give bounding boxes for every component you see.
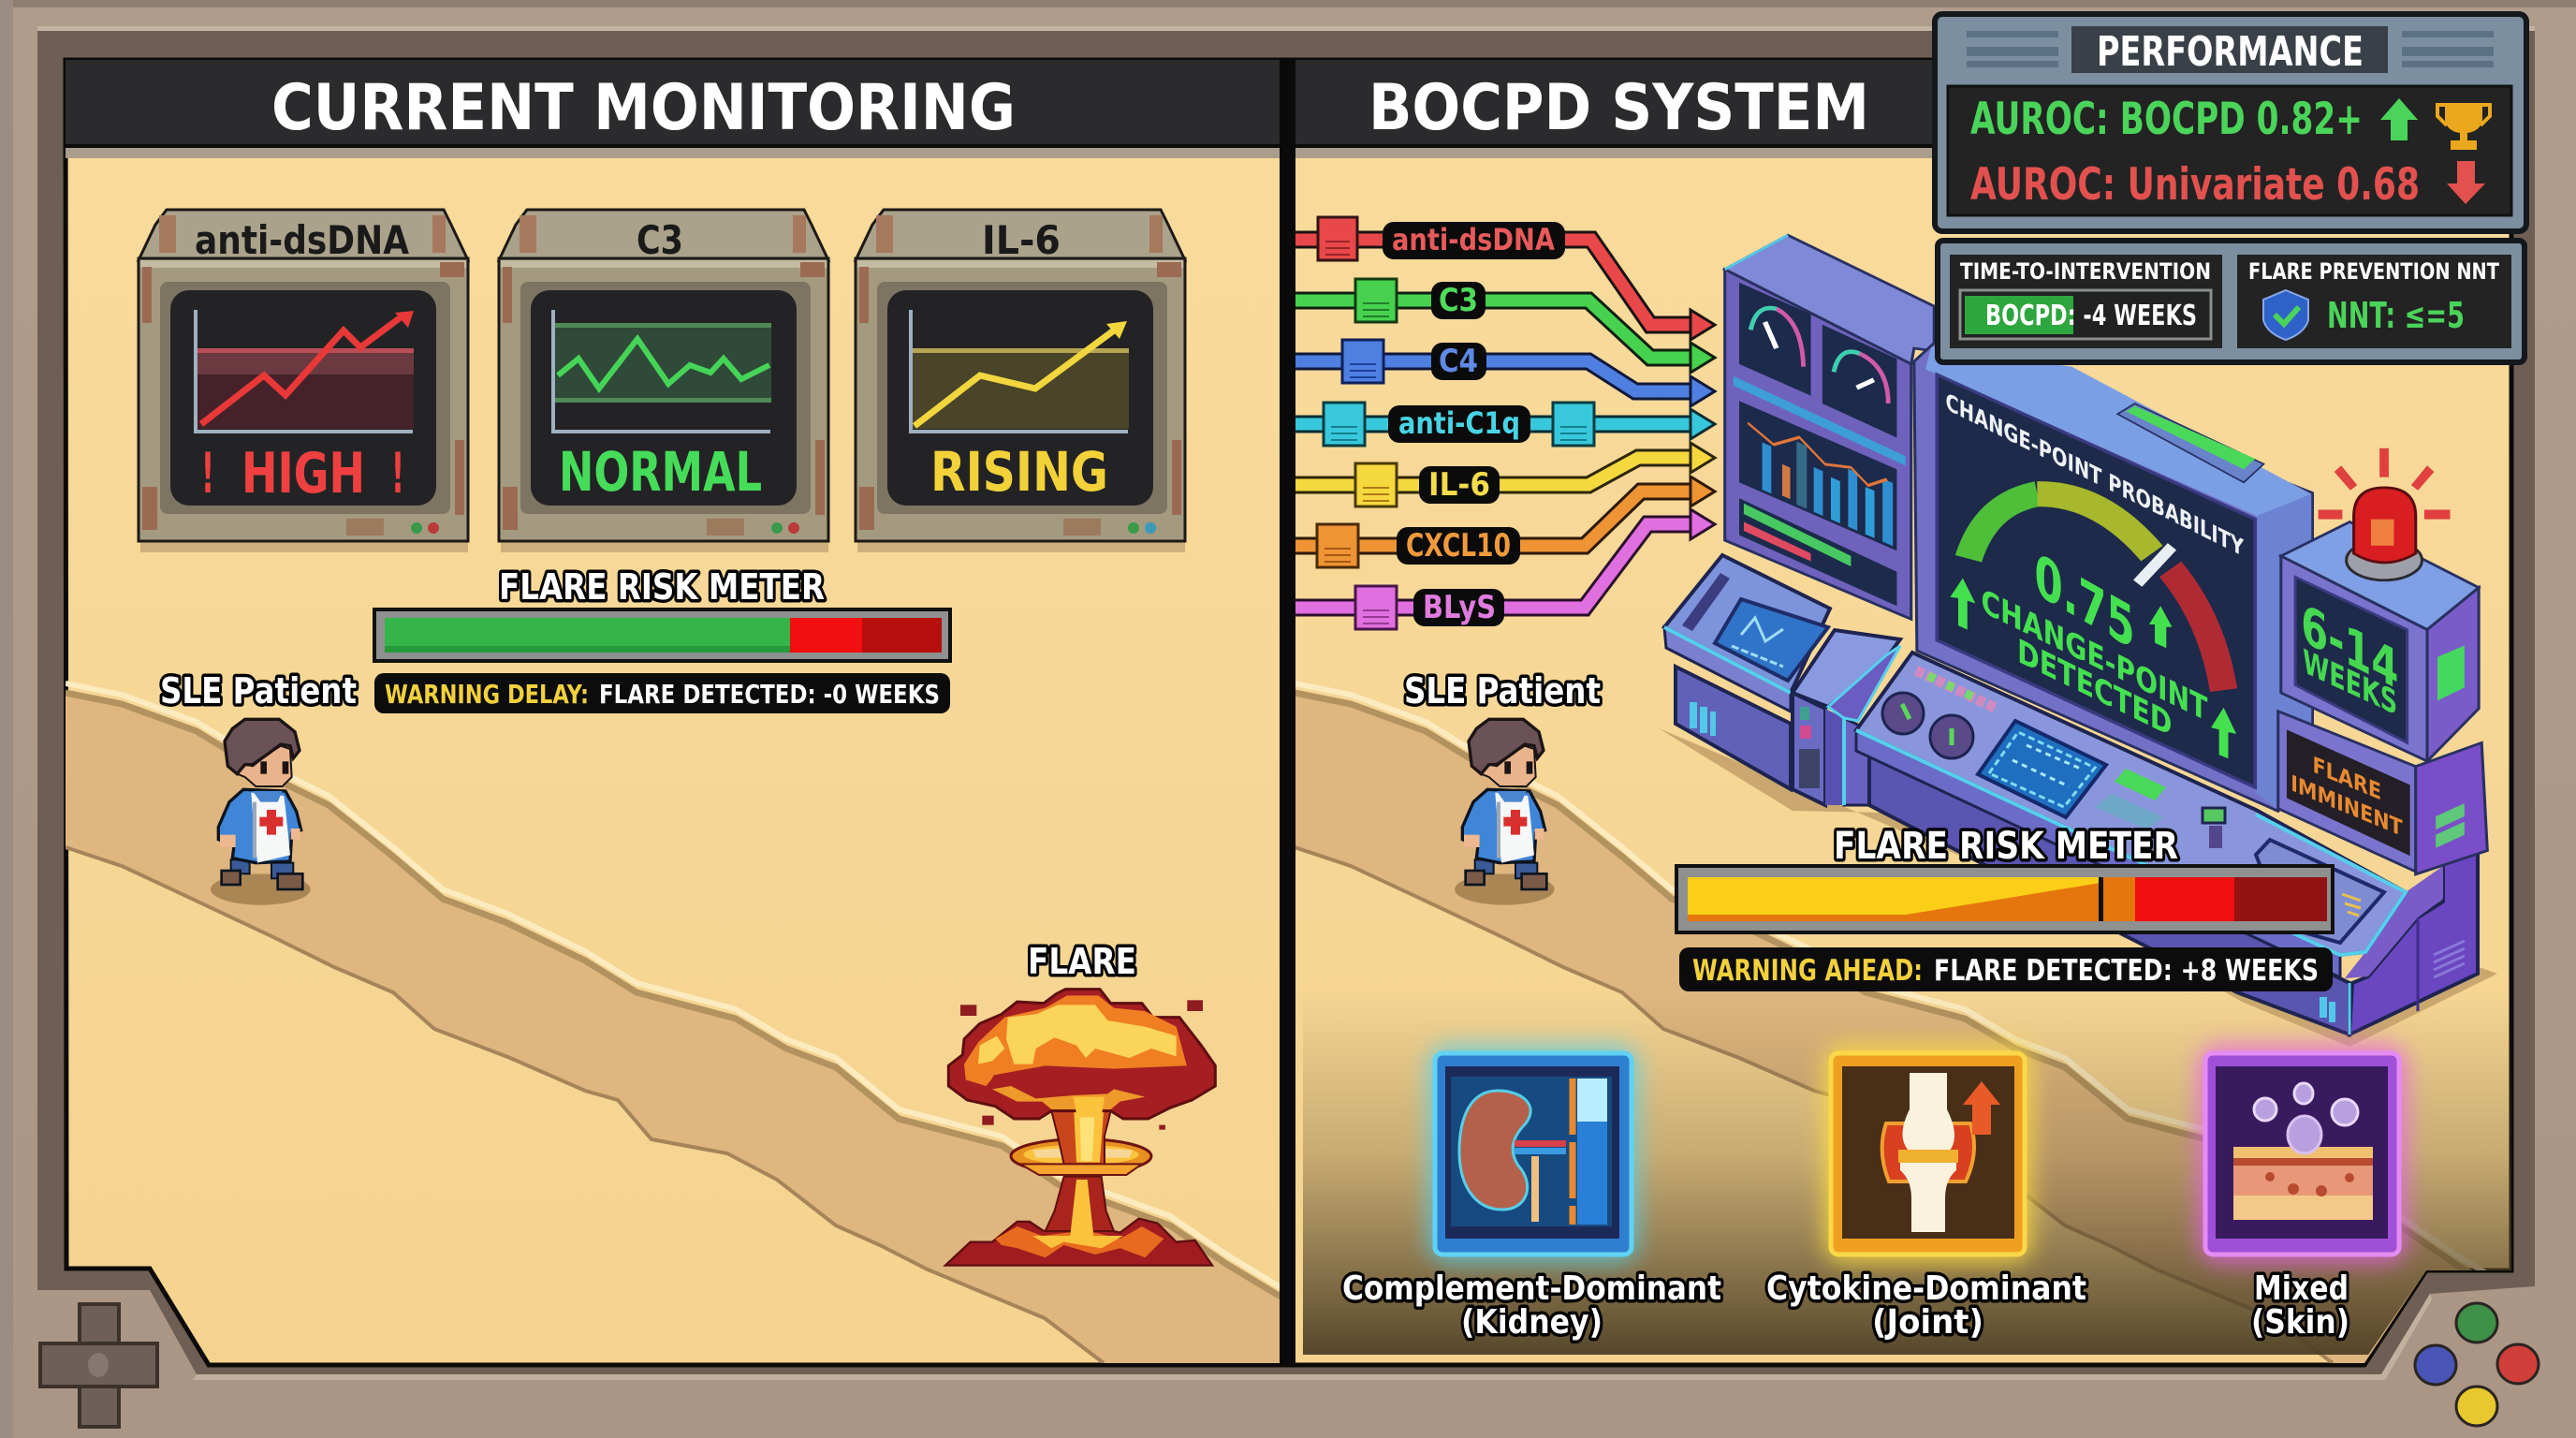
label: complement-dominant: [1342, 1269, 1721, 1342]
metric: univariate AUROC: AUROC: Univariate 0.68: [1970, 159, 2420, 211]
label: complement-dominant: Complement-Dominant: [1342, 1269, 1721, 1308]
panel divider: [1280, 60, 1295, 1365]
label: mixed: Mixed: [2254, 1269, 2349, 1308]
pedestal: [1869, 749, 2478, 1034]
panel: intervention and NNT: [1938, 241, 2525, 362]
icon: patient right: [1455, 719, 1555, 905]
stream: anti-dsDNA: anti-dsDNA: [1392, 222, 1555, 257]
stream: anti-dsDNA: [1295, 217, 1715, 340]
monitor: anti-dsDNA: HIGH: [242, 441, 365, 506]
flare imminent module: [2278, 712, 2487, 874]
sand path left: [66, 683, 1281, 1367]
stream: IL-6: [1295, 443, 1715, 506]
warning delay label: WARNING DELAY:: [385, 679, 589, 710]
tower: [1793, 630, 1900, 805]
flare risk meter: current monitoring: [374, 566, 950, 661]
stream: anti-C1q: anti-C1q: [1398, 405, 1520, 441]
icons: game buttons: [2415, 1303, 2539, 1426]
card: flare prevention NNT: FLARE PREVENTION NNT: [2248, 258, 2500, 285]
stream: BLyS: [1295, 509, 1715, 629]
stream: CXCL10: [1295, 477, 1715, 567]
upper console modules: [1914, 343, 2487, 874]
card: flare prevention NNT: [2237, 255, 2511, 348]
main monitor: 0.75: [2034, 539, 2135, 664]
timer module: 6-14: [2301, 592, 2398, 702]
timer module: [2281, 521, 2479, 761]
label: SLE patient right: SLE Patient: [1404, 670, 1601, 712]
card: time to intervention: BOCPD: -4 WEEKS: [1985, 300, 2197, 332]
flare risk meter: bocpd: [1676, 825, 2333, 932]
icon: arrow down: [2447, 161, 2485, 204]
metric: BOCPD AUROC: AUROC: BOCPD 0.82+: [1970, 94, 2363, 145]
icon: complement-dominant kidney: [1427, 1044, 1639, 1264]
warning ahead label: FLARE DETECTED: +8 WEEKS: [1934, 954, 2319, 988]
panel: bocpd system: [1295, 683, 2511, 1367]
biomarker streams: [1295, 217, 1715, 629]
monitor: C3: C3: [637, 217, 683, 263]
monitor: IL-6: IL-6: [982, 217, 1061, 263]
label: complement-dominant: (Kidney): [1461, 1303, 1603, 1342]
main monitor: [1914, 343, 2312, 811]
icon: mixed skin: [2198, 1044, 2408, 1264]
monitor: IL-6: [856, 210, 1185, 552]
sand path right: [1295, 683, 2510, 1367]
monitor: C3: [499, 210, 828, 552]
label: flare: FLARE: [1028, 941, 1136, 982]
main monitor: CHANGE-POINT: [1981, 581, 2208, 730]
icon: cytokine-dominant joint: [1823, 1044, 2033, 1264]
lower shadow gradient: [1303, 992, 2511, 1355]
header: current monitoring: CURRENT MONITORING: [271, 71, 1016, 145]
stream: CXCL10: CXCL10: [1406, 527, 1511, 565]
warning delay label: [374, 673, 950, 713]
flare risk meter: current monitoring: FLARE RISK METER: [499, 566, 825, 608]
machine: BOCPD console: [1659, 235, 2497, 1047]
main monitor: DETECTED: [2017, 632, 2172, 745]
upper left rack: [1725, 235, 1934, 619]
icon: arrow up: [2380, 98, 2418, 140]
icon: trophy: [2437, 103, 2490, 150]
warning ahead label: WARNING AHEAD:: [1692, 954, 1923, 988]
header: bocpd system: [1295, 60, 2511, 158]
flare imminent module: IMMINENT: [2291, 770, 2403, 843]
heading: performance: PERFORMANCE: [2097, 28, 2364, 76]
icon: flare explosion: [945, 990, 1215, 1266]
siren: [2319, 448, 2451, 580]
header: current monitoring: [66, 60, 1281, 158]
flare risk meter: bocpd: FLARE RISK METER: [1834, 825, 2178, 868]
card: time to intervention: TIME-TO-INTERVENTION: [1960, 258, 2211, 285]
probability gauge: [1969, 494, 2224, 690]
card: flare prevention NNT: NNT: ≤=5: [2327, 295, 2465, 336]
monitor: anti-dsDNA: [139, 210, 468, 552]
warning ahead label: [1679, 947, 2333, 991]
stream: IL-6: IL-6: [1428, 466, 1490, 504]
panel: current monitoring: [66, 683, 1281, 1367]
stream: C4: [1295, 340, 1715, 406]
monitor: C3: NORMAL: [559, 440, 762, 504]
icon: patient left: [211, 719, 311, 905]
label: cytokine-dominant: [1766, 1269, 2086, 1342]
main monitor: CHANGE-POINT PROBABILITY: [1946, 388, 2245, 563]
stream: C3: [1295, 279, 1715, 373]
monitor: anti-dsDNA: !: [201, 441, 214, 506]
lower left desk: [1664, 555, 1830, 789]
label: cytokine-dominant: Cytokine-Dominant: [1766, 1269, 2086, 1308]
timer module: WEEKS: [2303, 642, 2397, 724]
stream: BLyS: BLyS: [1423, 589, 1496, 626]
label: mixed: (Skin): [2251, 1303, 2349, 1342]
stream: anti-C1q: [1295, 403, 1715, 446]
label: SLE patient left: SLE Patient: [160, 670, 357, 712]
monitor: anti-dsDNA: anti-dsDNA: [195, 217, 409, 263]
monitor: IL-6: RISING: [930, 440, 1108, 504]
stream: C3: C3: [1439, 282, 1478, 319]
panel: performance: [1935, 14, 2526, 231]
icon: d-pad: [40, 1304, 157, 1427]
control desk: [1856, 653, 2406, 977]
label: cytokine-dominant: (Joint): [1872, 1303, 1983, 1342]
header: bocpd system: BOCPD SYSTEM: [1368, 71, 1869, 145]
flare imminent module: FLARE: [2313, 752, 2381, 806]
monitor: anti-dsDNA: !: [391, 441, 404, 506]
card: time to intervention: [1950, 255, 2222, 348]
label: mixed: [2251, 1269, 2349, 1342]
stream: C4: C4: [1439, 343, 1478, 380]
warning delay label: FLARE DETECTED: -0 WEEKS: [599, 679, 940, 710]
